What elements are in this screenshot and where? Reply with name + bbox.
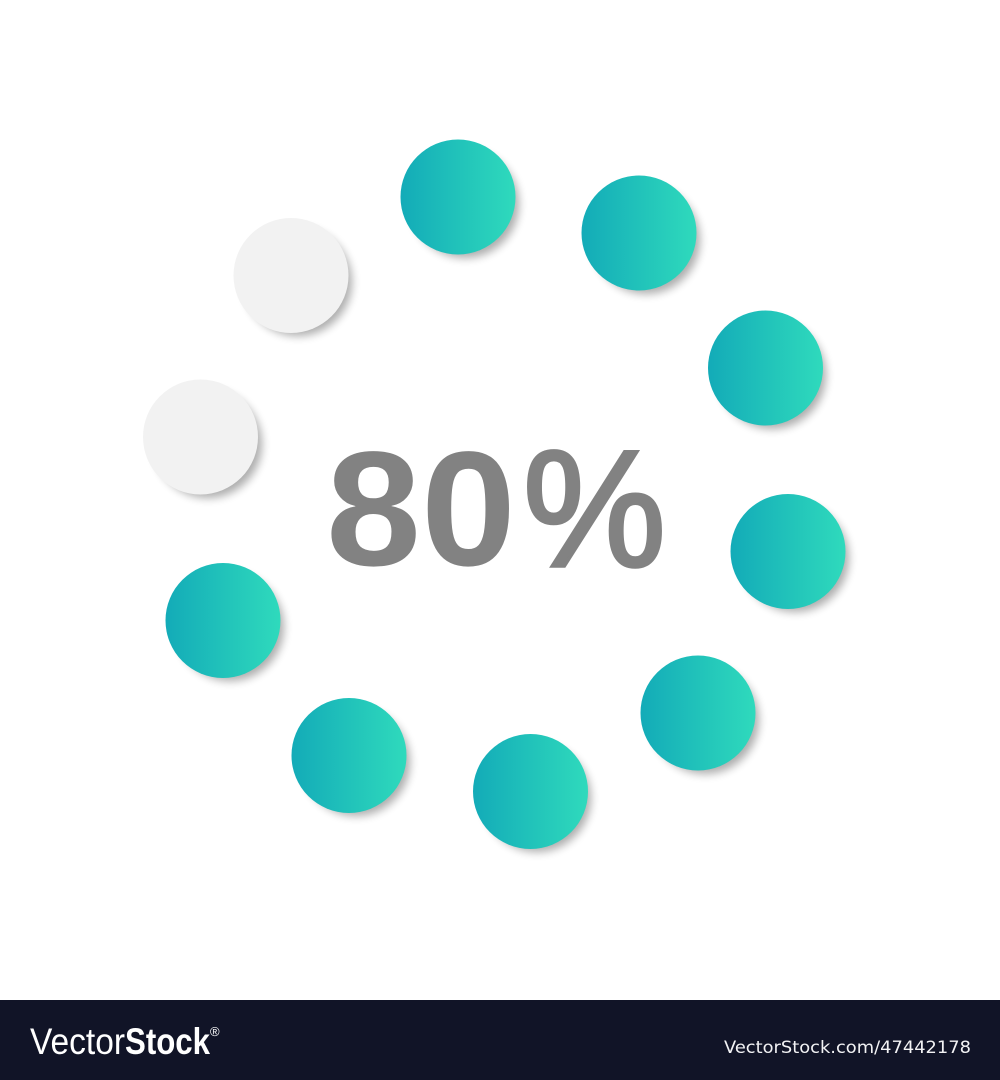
dot 6: filled: [473, 734, 591, 852]
footer logo: Stock: [125, 1021, 210, 1062]
dot 5: filled: [640, 656, 759, 774]
dot 9: empty: [143, 380, 262, 498]
progress ring of ten dots: [143, 140, 849, 852]
registered mark: ®: [210, 1024, 220, 1039]
dot 1: filled: [400, 140, 519, 258]
footer logo: [30, 1021, 210, 1062]
percentage label: [326, 417, 666, 602]
percentage label: 80: [326, 417, 516, 600]
dot 7: filled: [292, 698, 410, 816]
dot 2: filled: [582, 176, 700, 294]
percentage label: %: [523, 417, 666, 602]
dot 4: filled: [730, 494, 849, 612]
footer bar: [0, 1000, 1000, 1080]
footer image id: VectorStock.com/47442178: [724, 1038, 971, 1058]
dot 3: filled: [708, 310, 826, 429]
footer logo: Vector: [30, 1021, 125, 1062]
dot 10: empty: [234, 218, 352, 336]
dot 8: filled: [166, 563, 284, 681]
